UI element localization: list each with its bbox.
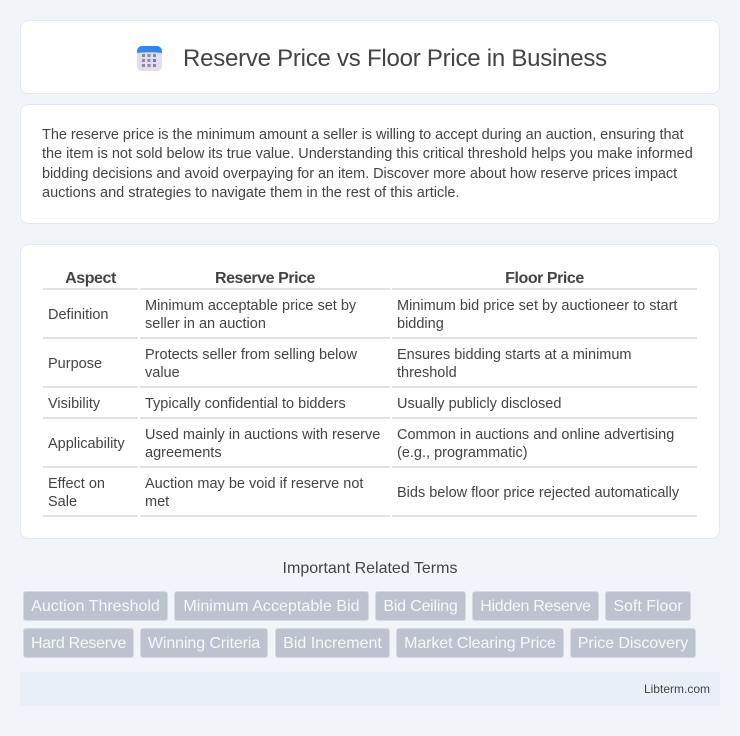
panel: comparison table: seller in an auction (145, 316, 266, 332)
panel: comparison table: Visibility (48, 396, 100, 412)
panel: title card (20, 20, 720, 94)
panel: comparison table: Common in auctions and online advertising (397, 427, 674, 443)
panel: comparison table: Protects seller from selling below (145, 347, 357, 363)
footer bar (20, 672, 720, 706)
tags: related terms: Auction Threshold (31, 598, 160, 615)
panel: intro text: auctions and strategies to navigate them in the rest of this article. (42, 185, 460, 201)
panel: comparison table: Auction may be void if reserve not (145, 476, 363, 492)
tags: related terms: Price Discovery (578, 635, 688, 652)
panel: comparison table: Typically confidential to bidders (145, 396, 346, 412)
panel: comparison table: Aspect (65, 270, 116, 287)
tags: related terms: Market Clearing Price (404, 635, 556, 652)
panel: comparison table: Ensures bidding starts at a minimum (397, 347, 632, 363)
panel: comparison table: Floor Price (505, 270, 584, 287)
panel: comparison table: Reserve Price (215, 270, 315, 287)
panel: intro text (20, 104, 720, 224)
tags: related terms: Hard Reserve (31, 635, 126, 652)
heading: related terms: Important Related Terms (283, 560, 457, 577)
tags: related terms: Winning Criteria (148, 635, 260, 652)
tags: related terms: Hidden Reserve (480, 598, 591, 615)
panel: comparison table: bidding (397, 316, 444, 332)
panel: comparison table: Minimum acceptable price set by (145, 298, 356, 314)
panel: comparison table: Minimum bid price set by auctioneer to start (397, 298, 677, 314)
panel: comparison table: Bids below floor price rejected automatically (397, 485, 679, 501)
panel: comparison table: value (145, 365, 180, 381)
panel: comparison table: Sale (48, 494, 77, 510)
panel: comparison table: Definition (48, 307, 108, 323)
title: Reserve Price vs Floor Price in Business (183, 45, 607, 72)
icon: calendar (137, 46, 162, 71)
panel: intro text: the item is not sold below its true value. Understanding this critical threshold helps you make informed (42, 146, 693, 162)
panel: comparison table: Applicability (48, 436, 125, 452)
panel: comparison table: Purpose (48, 356, 102, 372)
panel: comparison table: Effect on (48, 476, 105, 492)
panel: comparison table: Used mainly in auctions with reserve (145, 427, 380, 443)
panel: comparison table (20, 244, 720, 539)
footer credit: Libterm.com (644, 682, 710, 696)
panel: comparison table: threshold (397, 365, 457, 381)
panel: comparison table: (e.g., programmatic) (397, 445, 528, 461)
panel: comparison table: met (145, 494, 169, 510)
panel: intro text: The reserve price is the minimum amount a seller is willing to accept during an auction, ensuring that (42, 127, 683, 143)
panel: intro text: bidding decisions and avoid overpaying for an item. Discover more about how reserve prices impact (42, 166, 677, 182)
tags: related terms: Bid Ceiling (383, 598, 458, 615)
tags: related terms: Soft Floor (613, 598, 683, 615)
tags: related terms: Bid Increment (283, 635, 382, 652)
panel: comparison table: agreements (145, 445, 222, 461)
tags: related terms: Minimum Acceptable Bid (183, 598, 360, 615)
panel: comparison table: Usually publicly disclosed (397, 396, 561, 412)
